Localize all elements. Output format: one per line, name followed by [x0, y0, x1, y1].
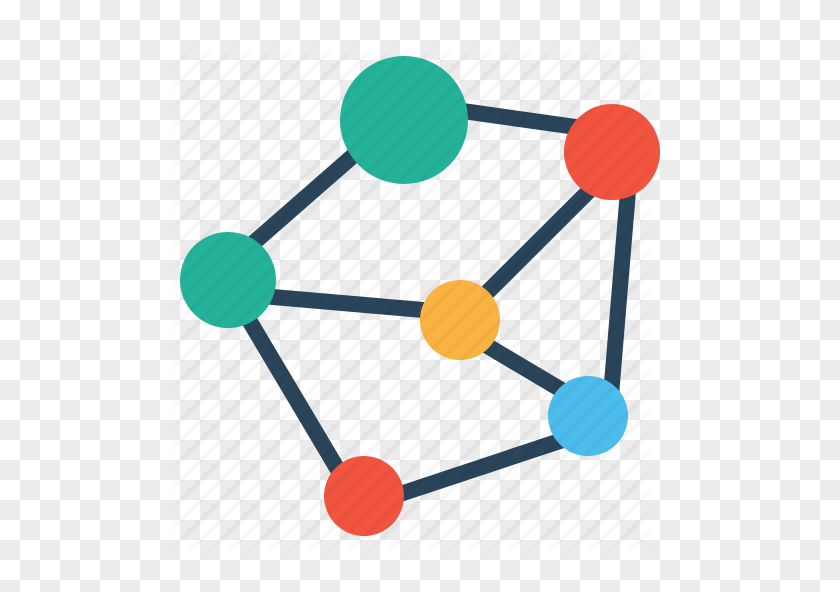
node: right blue [548, 376, 628, 456]
node: large teal [340, 56, 468, 184]
node: left teal [180, 232, 276, 328]
connecting lines [240, 109, 628, 501]
network graph icon [180, 56, 660, 536]
diagonal stripe overlay [186, 62, 638, 538]
node: centre yellow [420, 280, 500, 360]
node: top right red [564, 104, 660, 200]
node: bottom red [324, 456, 404, 536]
